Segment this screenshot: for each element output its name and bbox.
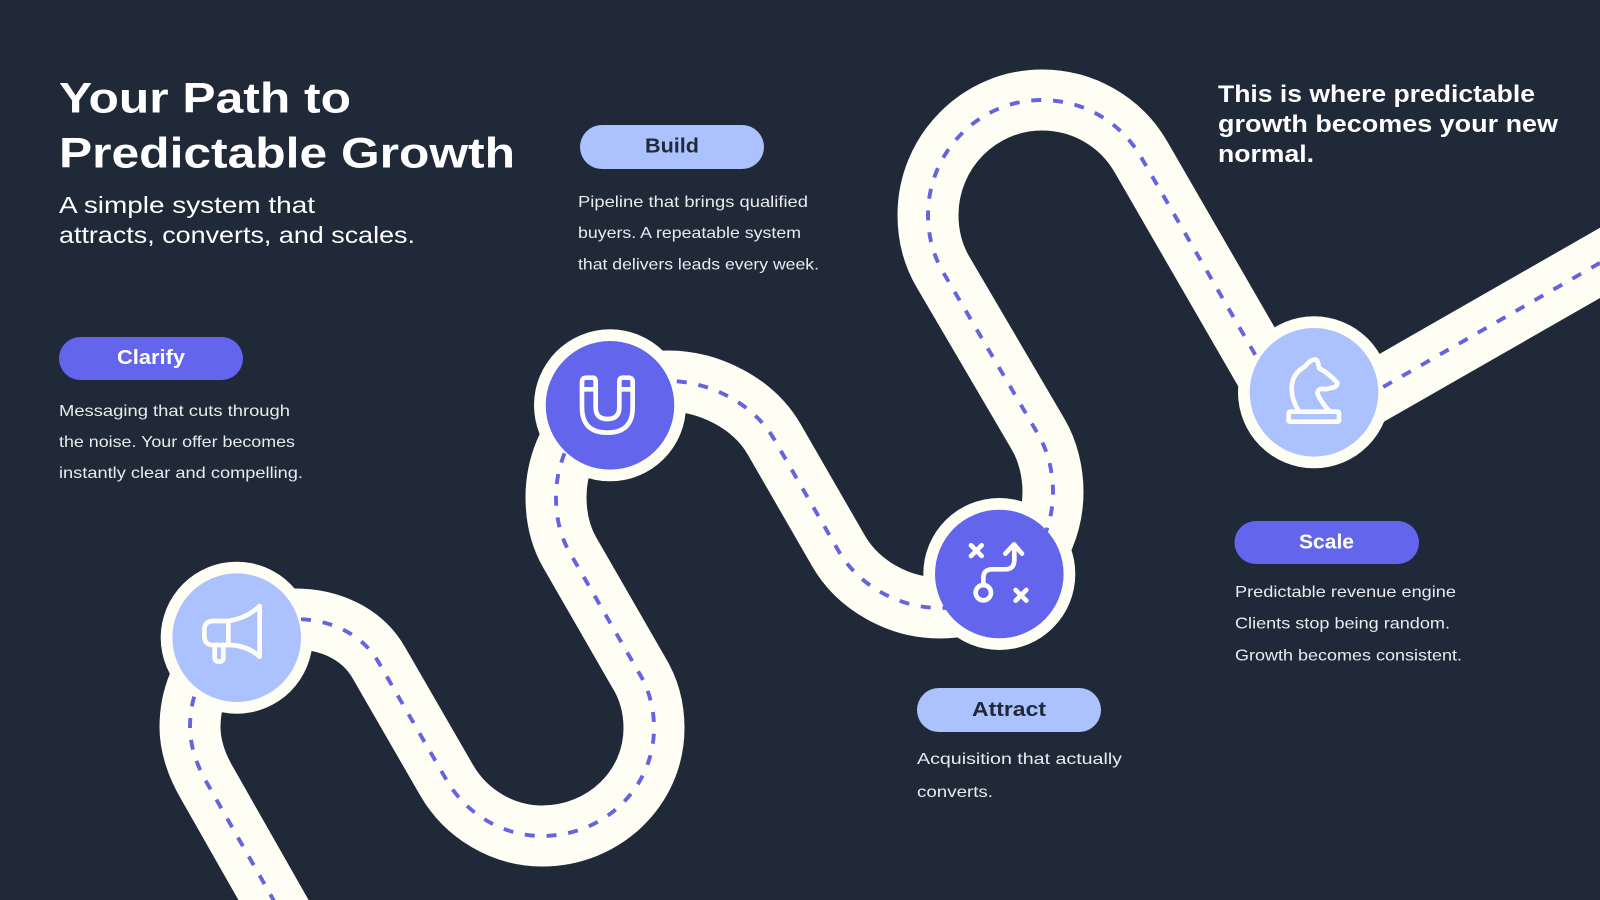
pill: Attract xyxy=(917,688,1101,732)
dashed centre line xyxy=(190,100,1600,900)
pill: Scale xyxy=(1234,521,1419,564)
text: Build description xyxy=(578,194,819,274)
subtitle xyxy=(59,192,415,248)
text: Scale description xyxy=(1235,584,1462,664)
node: Clarify disc with megaphone xyxy=(172,573,301,702)
pill: Scale: Scale xyxy=(1299,532,1354,554)
subtitle: A simple system that xyxy=(59,192,316,218)
winding road xyxy=(161,100,1600,900)
text: Build description: Pipeline that brings qualified xyxy=(578,194,808,211)
pill: Attract: Attract xyxy=(972,699,1046,721)
closing statement xyxy=(1218,81,1559,168)
text: Clarify description: the noise. Your offer becomes xyxy=(59,434,295,451)
text: Scale description: Predictable revenue engine xyxy=(1235,584,1456,601)
text: Attract description: converts. xyxy=(917,784,993,801)
road band xyxy=(190,100,1600,900)
icon: magnet xyxy=(582,378,633,433)
icon: chess knight xyxy=(1289,360,1339,422)
pill: Clarify: Clarify xyxy=(117,347,186,369)
title xyxy=(59,76,515,178)
text: Build description: that delivers leads every week. xyxy=(578,256,819,274)
text: Build description: buyers. A repeatable system xyxy=(578,225,801,242)
closing statement: growth becomes your new xyxy=(1218,111,1559,138)
pill: Clarify xyxy=(59,337,243,380)
text: Attract description xyxy=(917,751,1122,801)
pill: Build: Build xyxy=(645,136,699,158)
pill: Build xyxy=(580,125,764,169)
text: Scale description: Clients stop being random. xyxy=(1235,616,1450,632)
closing statement: This is where predictable xyxy=(1218,81,1535,108)
icon: strategy route xyxy=(971,544,1026,601)
closing statement: normal. xyxy=(1218,141,1314,168)
text: Clarify description xyxy=(59,403,303,482)
subtitle: attracts, converts, and scales. xyxy=(59,222,415,248)
node: Scale disc with chess knight xyxy=(1250,328,1378,457)
node rings xyxy=(161,316,1390,714)
node: Build disc with magnet xyxy=(546,341,674,470)
title: Predictable Growth xyxy=(59,130,515,178)
node: Attract disc with route xyxy=(935,510,1064,638)
text: Scale description: Growth becomes consistent. xyxy=(1235,648,1462,664)
icon: megaphone xyxy=(204,606,260,662)
text: Clarify description: Messaging that cuts through xyxy=(59,403,290,420)
text: Attract description: Acquisition that actually xyxy=(917,751,1122,768)
text: Clarify description: instantly clear and compelling. xyxy=(59,465,303,482)
title: Your Path to xyxy=(59,76,351,122)
